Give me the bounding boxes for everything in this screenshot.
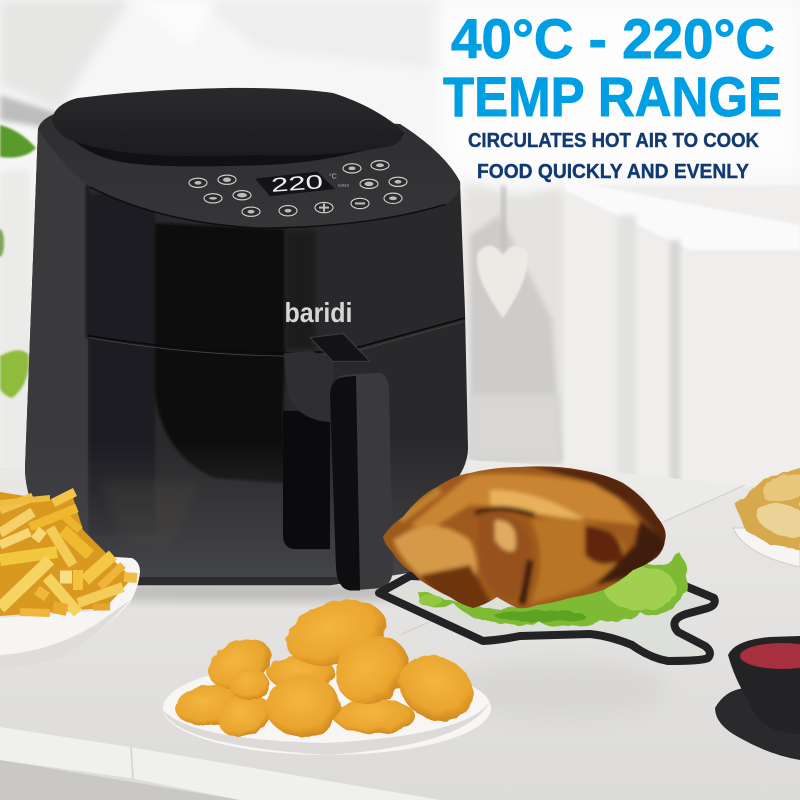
gloss reflections [155, 223, 285, 483]
right plate of fried food [733, 468, 800, 567]
lettuce [418, 553, 688, 627]
plate of nuggets [163, 590, 491, 755]
headline [443, 7, 782, 128]
lid shadow band [60, 120, 404, 166]
brand logo: baridi [284, 297, 352, 328]
control panel [189, 161, 407, 216]
display [255, 171, 335, 196]
subheading: FOOD QUICKLY AND EVENLY [477, 160, 749, 183]
dark handle reflection [283, 411, 330, 549]
air fryer [20, 88, 480, 607]
control panel: MINS [338, 183, 349, 188]
handle top [310, 333, 370, 361]
fryer body [25, 124, 468, 586]
drawer handle [284, 333, 393, 590]
nuggets [172, 590, 484, 743]
touch buttons [189, 161, 407, 216]
handle grip [330, 373, 393, 590]
subheading: CIRCULATES HOT AIR TO COOK [468, 129, 759, 152]
subheading [468, 129, 759, 183]
unit labels: °C [329, 173, 337, 181]
side panel band [25, 130, 88, 522]
headline: 40°C - 220°C [451, 7, 775, 70]
display text 220: 220 [270, 172, 324, 197]
cutting board [379, 576, 715, 661]
fries [0, 492, 137, 616]
countertop [0, 460, 800, 800]
control deck [38, 114, 460, 228]
dipping bowl on saucer [715, 636, 800, 760]
blurred green leaves [0, 125, 36, 398]
seam between upper and drawer [88, 318, 465, 353]
handle neck [284, 351, 334, 422]
lid [52, 88, 402, 156]
roast chicken [383, 466, 666, 608]
